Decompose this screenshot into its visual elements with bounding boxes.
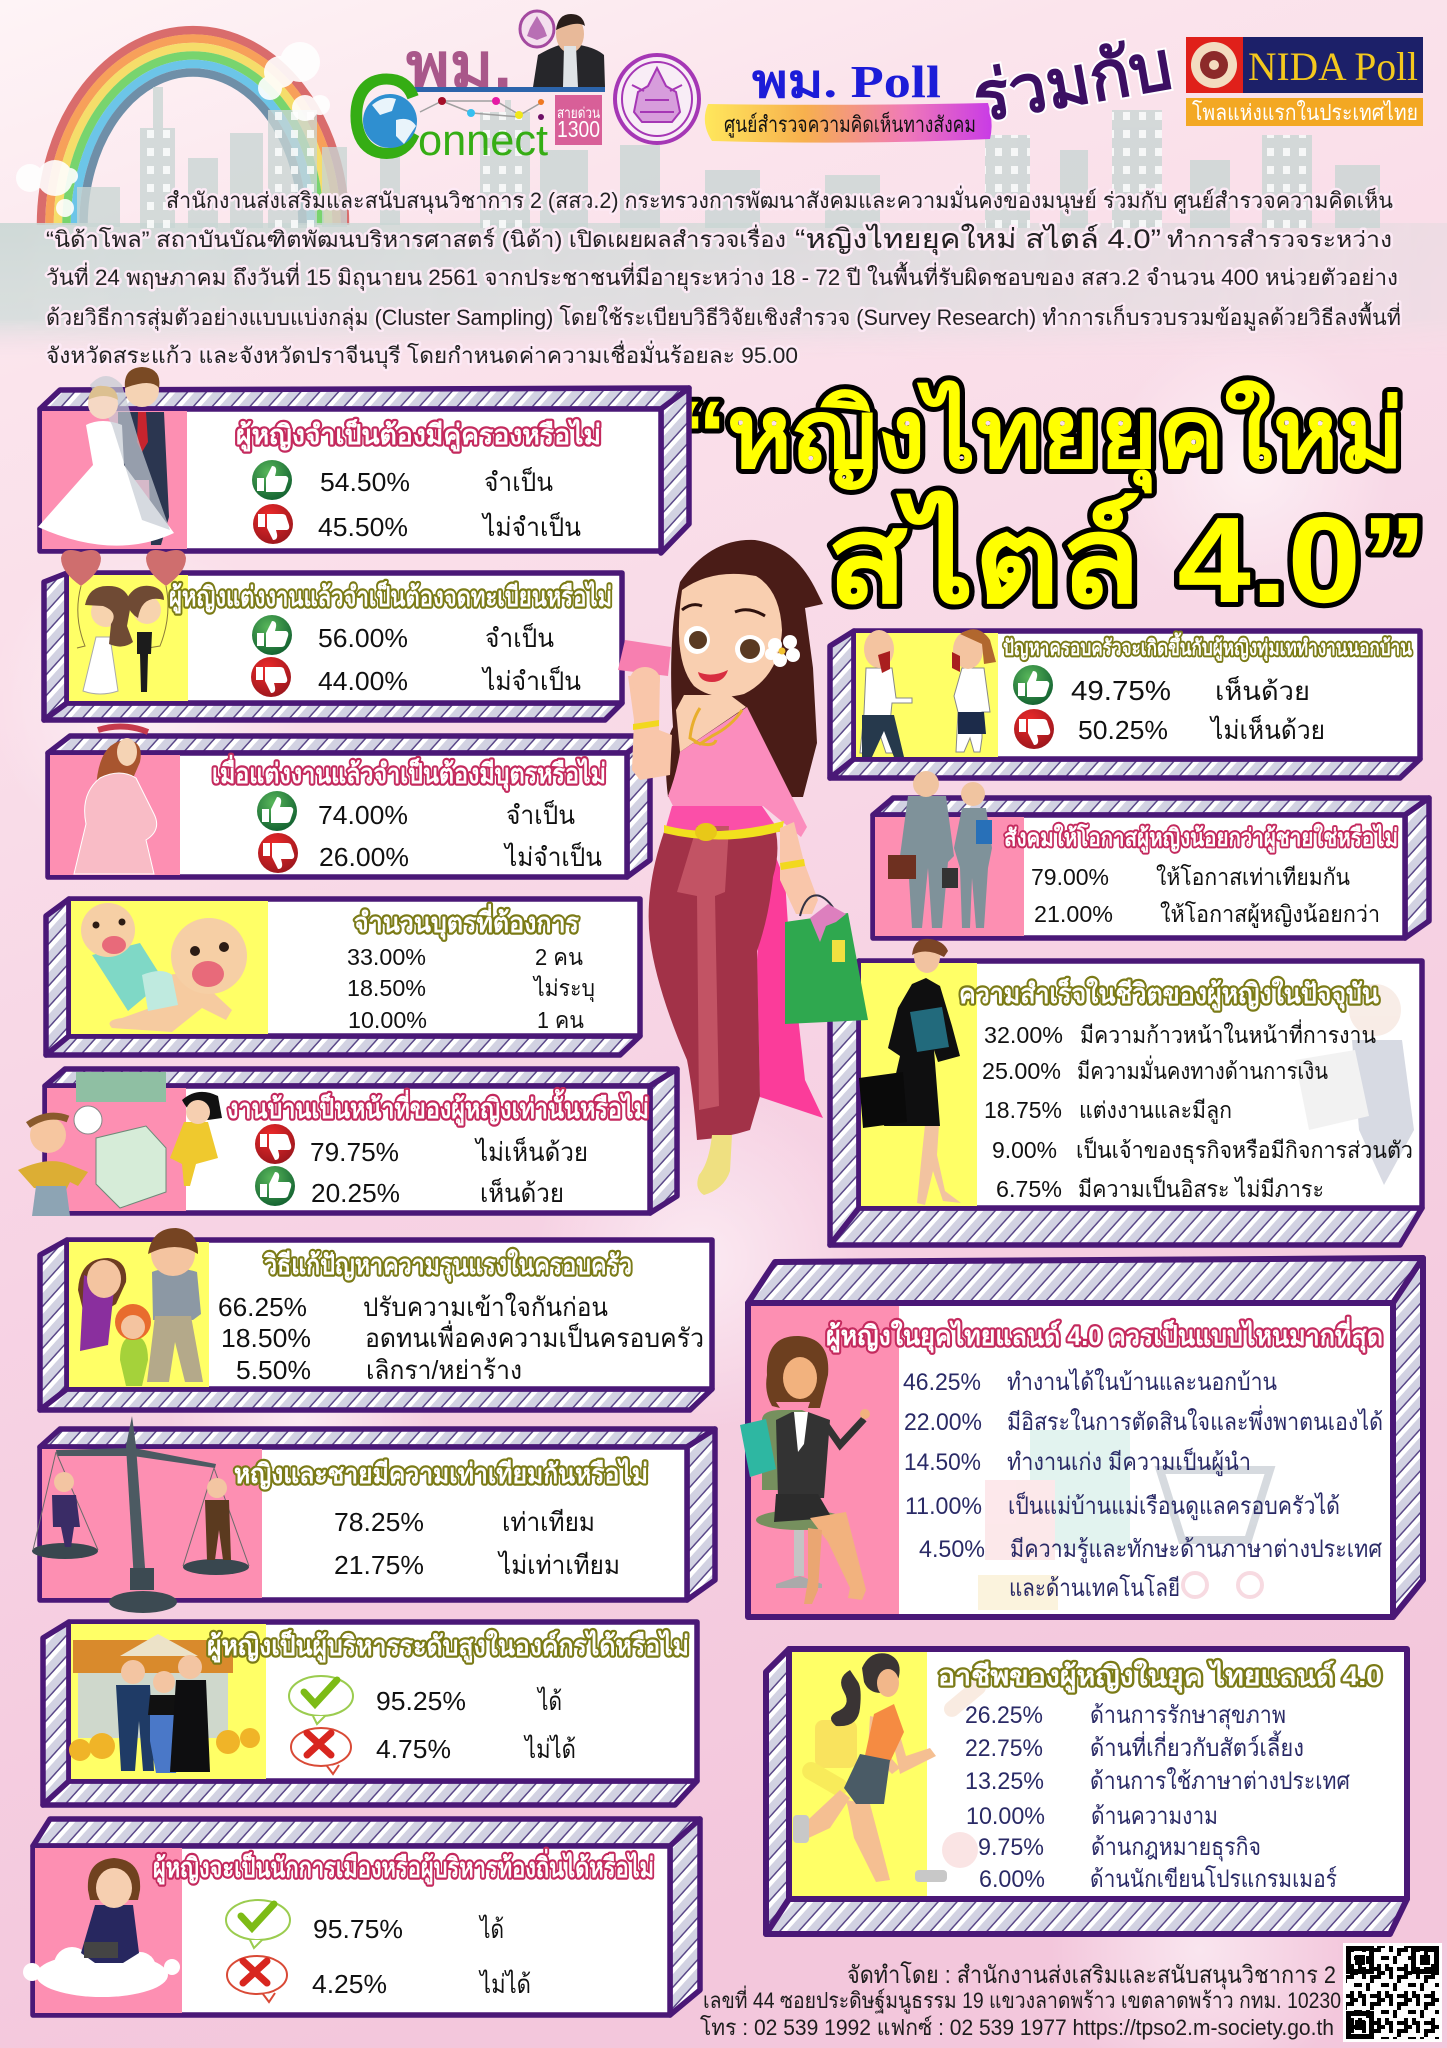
row: 78.25: 78.25% [334, 1507, 424, 1537]
intro paragraph: ทำการสำรวจระหว่าง [1167, 227, 1392, 252]
illustration: executives and building [69, 1634, 260, 1773]
main title: สไตล์ 4.0” [827, 491, 1427, 628]
small seal [520, 11, 554, 47]
label: two lines: และด้านเทคโนโลยี [1009, 1574, 1180, 1602]
hair [666, 540, 823, 797]
poll title: พม. Poll [752, 56, 941, 107]
panel box [40, 1429, 715, 1600]
panel box [33, 1819, 700, 2015]
illustration: pregnant woman [74, 726, 157, 874]
row: 10.00: 10.00% [966, 1803, 1045, 1830]
row: 13.25: 13.25% [965, 1768, 1044, 1795]
label: ด้านการใช้ภาษาต่างประเทศ [1090, 1767, 1350, 1795]
row: 18.75: 18.75% [984, 1097, 1062, 1123]
row: 5.50: 5.50% [236, 1355, 311, 1385]
panel box [44, 573, 622, 720]
intro paragraph: สำนักงานส่งเสริมและสนับสนุนวิชาการ 2 (สสว.2) กระทรวงการพัฒนาสังคมและความมั่นคงของมนุษย์ ร่วมกับ ศูนย์สำรวจความคิดเห็น [166, 185, 1393, 214]
row: 45.50: 45.50% [318, 512, 408, 542]
label: เป็นเจ้าของธุรกิจหรือมีกิจการส่วนตัว [1076, 1135, 1413, 1164]
heading: ผู้หญิงเป็นผู้บริหารระดับสูงในองค์กรได้หรือไม่ [207, 1628, 689, 1663]
panel: success in life [830, 939, 1422, 1245]
illustration: bride and groom [38, 367, 174, 546]
label: ไม่เห็นด้วย [474, 1136, 588, 1167]
label: ได้ [536, 1686, 562, 1716]
label: ปรับความเข้าใจกันก่อน [363, 1292, 608, 1322]
panel box [830, 961, 1422, 1245]
panel box [766, 1649, 1407, 1934]
illustration: business couple [888, 771, 992, 928]
illustration: couple with hearts [61, 550, 186, 694]
row: 11.00: 11.00% [905, 1493, 982, 1520]
row: 9.00: 9.00% [992, 1137, 1057, 1163]
label: ไม่จำเป็น [503, 841, 602, 872]
label: ทำงานเก่ง มีความเป็นผู้นำ [1007, 1447, 1251, 1477]
row: 4.25: 4.25% [312, 1969, 387, 1999]
label: อดทนเพื่อคงความเป็นครอบครัว [365, 1320, 704, 1353]
skirt [649, 832, 777, 1140]
label: ทำงานได้ในบ้านและนอกบ้าน [1007, 1368, 1277, 1396]
row: 54.50: 54.50% [320, 467, 410, 497]
panel box [45, 1069, 677, 1213]
row: 66.25: 66.25% [218, 1292, 307, 1322]
row: 32.00: 32.00% [984, 1022, 1063, 1048]
label: ด้านกฎหมายธุรกิจ [1091, 1834, 1261, 1862]
illustration: woman in Thai dress [618, 540, 868, 1195]
icon: thumbs up [255, 1166, 295, 1206]
network dots [420, 97, 544, 120]
panel box [873, 798, 1429, 938]
row: 26.00: 26.00% [319, 842, 409, 872]
label: two lines: มีความรู้และทักษะด้านภาษาต่างประเทศ [1010, 1536, 1382, 1564]
label: ไม่ได้ [478, 1969, 531, 1999]
row: 21.00: 21.00% [1034, 901, 1113, 927]
row: 21.75: 21.75% [334, 1550, 424, 1580]
word onnect: onnect [418, 116, 548, 165]
heading: หญิงและชายมีความเท่าเทียมกันหรือไม่ [234, 1458, 648, 1490]
label: จำเป็น [485, 622, 554, 653]
row: 44.00: 44.00% [318, 666, 408, 696]
blouse and sash [668, 707, 807, 837]
minister portrait [533, 14, 605, 87]
label: เลิกรา/หย่าร้าง [366, 1355, 522, 1385]
row: 18.50: 18.50% [221, 1323, 311, 1353]
panel: society gives less opportunity [873, 771, 1429, 938]
city skyline [0, 87, 1447, 360]
footer credits: โทร : 02 539 1992 แฟกซ์ : 02 539 1977 https://tpso2.m-society.go.th [700, 2015, 1334, 2040]
intro paragraph: วันที่ 24 พฤษภาคม ถึงวันที่ 15 มิถุนายน 2561 จากประชาชนที่มีอายุระหว่าง 18 - 72 ปี ในพื้นที่รับผิดชอบของ สสว.2 จำนวน 400 หน่วยตัวอย่าง [46, 262, 1398, 291]
orange tagline bar [1186, 98, 1423, 126]
panel: housework [18, 1069, 677, 1216]
illustration: balance scale [32, 1416, 249, 1613]
heading: ความสำเร็จในชีวิตของผู้หญิงในปัจจุบัน [959, 976, 1379, 1011]
nida poll word: NIDA Poll [1248, 44, 1418, 89]
panel: must register marriage [44, 550, 622, 720]
row: 74.00: 74.00% [318, 800, 408, 830]
hotline 1300: 1300 [557, 116, 600, 142]
icon: thumbs down [258, 833, 298, 873]
panel: must have children [48, 726, 650, 877]
row: 6.00: 6.00% [979, 1866, 1045, 1893]
QR code [1343, 1943, 1442, 2042]
gradient strip [705, 103, 992, 143]
row: 79.75: 79.75% [310, 1137, 399, 1167]
label: ไม่จำเป็น [481, 665, 581, 696]
panel: solving family violence [40, 1228, 712, 1410]
label: เห็นด้วย [1215, 675, 1310, 706]
label: ไม่ได้ [523, 1734, 576, 1764]
label: ด้านนักเขียนโปรแกรมเมอร์ [1090, 1865, 1337, 1893]
illustration: faded certificate woman [1295, 984, 1414, 1185]
intro paragraph: ด้วยวิธีการสุ่มตัวอย่างแบบแบ่งกลุ่ม (Cluster Sampling) โดยใช้ระเบียบวิธีวิจัยเชิงสำรวจ (Survey Research) ทำการเก็บรวบรวมข้อมูลด้วยวิธีลงพื้นที่ [46, 302, 1401, 331]
label: 1 คน [537, 1007, 584, 1033]
label: ไม่จำเป็น [481, 511, 581, 542]
rainbow clouds [16, 42, 330, 217]
intro paragraph: “นิด้าโพล” สถาบันบัณฑิตพัฒนบริหารศาสตร์ (นิด้า) เปิดเผยผลสำรวจเรื่อง [46, 224, 786, 252]
row: 6.75: 6.75% [996, 1176, 1062, 1202]
label: ให้โอกาสผู้หญิงน้อยกว่า [1160, 901, 1380, 928]
label: มีความมั่นคงทางด้านการเงิน [1077, 1055, 1328, 1084]
navy box [1186, 37, 1423, 93]
label: ไม่เห็นด้วย [1209, 714, 1325, 745]
red emblem [1186, 37, 1243, 93]
row: 33.00: 33.00% [347, 944, 426, 970]
illustration: faded shopping background [978, 1430, 1270, 1610]
panel: family problems [830, 629, 1420, 778]
panel box [40, 388, 689, 553]
panel: women as politicians [23, 1819, 700, 2015]
blue underline [410, 87, 605, 92]
hotline 1300 [555, 95, 602, 145]
row: 46.25: 46.25% [903, 1369, 981, 1396]
hotline 1300: สายด่วน [557, 105, 600, 122]
icon: thumbs up [257, 791, 297, 831]
intro paragraph: จังหวัดสระแก้ว และจังหวัดปราจีนบุรี โดยกำหนดค่าความเชื่อมั่นร้อยละ 95.00 [46, 340, 798, 369]
tagline: โพลแห่งแรกในประเทศไทย [1192, 100, 1418, 125]
main title: “หญิงไทยยุคใหม่ [677, 380, 1404, 493]
row: 4.50: 4.50% [919, 1536, 985, 1563]
row: 10.00: 10.00% [348, 1007, 427, 1033]
row: 20.25: 20.25% [311, 1178, 400, 1208]
ministry seal [615, 55, 699, 143]
row: 56.00: 56.00% [318, 623, 408, 653]
label: ได้ [478, 1914, 504, 1944]
footer credits [700, 1961, 1341, 2040]
heading: ผู้หญิงแต่งงานแล้วจำเป็นต้องจดทะเบียนหรือไม่ [169, 579, 612, 614]
row: 95.25: 95.25% [376, 1686, 466, 1716]
icon: check bubble [226, 1900, 290, 1948]
icon: thumbs down [1014, 709, 1054, 749]
heading: วิธีแก้ปัญหาความรุนแรงในครอบครัว [263, 1249, 632, 1282]
illustration: babies [81, 903, 247, 1032]
row: 25.00: 25.00% [982, 1058, 1061, 1084]
pink drape [757, 830, 823, 1118]
shoes [697, 1135, 732, 1195]
gold belt [664, 821, 784, 841]
row: 50.25: 50.25% [1078, 715, 1168, 745]
label: มีความก้าวหน้าในหน้าที่การงาน [1080, 1019, 1376, 1048]
main title [677, 380, 1427, 628]
panel: women as senior executives [43, 1622, 697, 1805]
panel box [830, 631, 1420, 778]
label: จำเป็น [506, 799, 575, 830]
logo: MSDHS Connect [346, 11, 605, 183]
intro paragraph: “หญิงไทยยุคใหม่ สไตล์ 4.0” [795, 223, 1161, 256]
heading: ผู้หญิงจำเป็นต้องมีคู่ครองหรือไม่ [236, 417, 601, 452]
together with: ร่วมกับ [967, 27, 1178, 137]
illustration: arguing family [78, 1228, 203, 1386]
label: เป็นแม่บ้านแม่เรือนดูแลครอบครัวได้ [1008, 1491, 1340, 1521]
logo text: phor mor: พม. [406, 32, 512, 101]
logo: MSDHS Poll [705, 56, 992, 143]
label: มีอิสระในการตัดสินใจและพึ่งพาตนเองได้ [1007, 1405, 1383, 1436]
panel: gender equality [32, 1416, 715, 1613]
face [679, 574, 782, 697]
panel box [43, 1622, 697, 1805]
row: 79.00: 79.00% [1031, 864, 1109, 890]
icon: thumbs down [251, 657, 291, 697]
illustration: faded medical background [799, 1676, 989, 1868]
illustration: runner [793, 1653, 947, 1882]
label: ไม่เท่าเทียม [497, 1550, 620, 1580]
illustration: man woman and sink [18, 1072, 222, 1216]
label: ด้านความงาม [1091, 1803, 1218, 1830]
label: two lines [1009, 1536, 1382, 1602]
label: ไม่ระบุ [532, 975, 595, 1002]
label: ด้านที่เกี่ยวกับสัตว์เลี้ยง [1090, 1730, 1304, 1762]
neck and chest [676, 695, 746, 752]
row: 9.75: 9.75% [978, 1834, 1044, 1861]
heading: เมื่อแต่งงานแล้วจำเป็นต้องมีบุตรหรือไม่ [212, 754, 606, 791]
right arm [780, 822, 818, 914]
illustration: woman on chair [740, 1336, 870, 1604]
label: จำเป็น [484, 466, 553, 497]
panel box [46, 899, 640, 1055]
icon: thumbs up [252, 460, 292, 500]
footer credits: เลขที่ 44 ซอยประดิษฐ์มนูธรรม 19 แขวงลาดพร้าว เขตลาดพร้าว กทม. 10230 [703, 1985, 1341, 2014]
green shopping bag [785, 895, 868, 1024]
icon: thumbs up [1013, 665, 1053, 705]
row: 26.25: 26.25% [965, 1702, 1043, 1729]
icon: check bubble [289, 1676, 353, 1724]
panel: need a spouse [38, 367, 689, 553]
icon: thumbs up [252, 615, 292, 655]
panel: number of children wanted [46, 899, 640, 1055]
heading: จำนวนบุตรที่ต้องการ [354, 903, 579, 940]
row: 18.50: 18.50% [347, 975, 426, 1001]
heading: อาชีพของผู้หญิงในยุค ไทยแลนด์ 4.0 [938, 1660, 1382, 1693]
label: ด้านการรักษาสุขภาพ [1090, 1702, 1286, 1730]
illustration: woman on cloud [23, 1858, 180, 1997]
label: 2 คน [535, 944, 583, 970]
row: 22.00: 22.00% [904, 1409, 982, 1436]
magenta waist band [664, 806, 780, 834]
globe [363, 94, 417, 148]
label: มีความเป็นอิสระ ไม่มีภาระ [1078, 1174, 1324, 1202]
letter C: C [346, 51, 422, 183]
flower [765, 635, 800, 667]
strip caption: ศูนย์สำรวจความคิดเห็นทางสังคม [724, 110, 976, 138]
left arm with card [618, 640, 672, 780]
panel box [748, 1258, 1423, 1617]
rainbow [41, 30, 345, 225]
label: เท่าเทียม [502, 1507, 595, 1537]
label: เห็นด้วย [480, 1177, 564, 1208]
icon: cross bubble [291, 1728, 351, 1774]
logo: NIDA Poll [1186, 37, 1423, 126]
icon: cross bubble [227, 1956, 287, 2002]
footer credits: จัดทำโดย : สำนักงานส่งเสริมและสนับสนุนวิชาการ 2 [847, 1961, 1336, 1990]
necklace [690, 708, 742, 745]
illustration: businesswoman [859, 939, 961, 1205]
panel: careers for women [766, 1649, 1407, 1934]
illustration: arguing colleagues [860, 629, 996, 757]
heading: ผู้หญิงจะเป็นนักการเมืองหรือผู้บริหารท้องถิ่นได้หรือไม่ [153, 1848, 654, 1885]
heading: ผู้หญิงในยุคไทยแลนด์ 4.0 ควรเป็นแบบไหนมากที่สุด [826, 1316, 1383, 1353]
skirt fold [677, 826, 729, 1110]
icon: thumbs down [253, 504, 293, 544]
intro paragraph [46, 185, 1401, 369]
label: ให้โอกาสเท่าเทียมกัน [1156, 864, 1350, 890]
row: 95.75: 95.75% [313, 1914, 403, 1944]
row: 49.75: 49.75% [1071, 675, 1171, 706]
panel: ideal woman in Thailand 4.0 [740, 1258, 1423, 1617]
heading: งานบ้านเป็นหน้าที่ของผู้หญิงเท่านั้นหรือไม่ [227, 1088, 649, 1126]
label: แต่งงานและมีลูก [1079, 1097, 1232, 1124]
row: 14.50: 14.50% [904, 1449, 981, 1476]
panel box [40, 1240, 712, 1410]
icon: thumbs down [255, 1124, 295, 1164]
row: 4.75: 4.75% [376, 1734, 451, 1764]
panel box [48, 736, 650, 877]
row: 22.75: 22.75% [965, 1735, 1043, 1762]
